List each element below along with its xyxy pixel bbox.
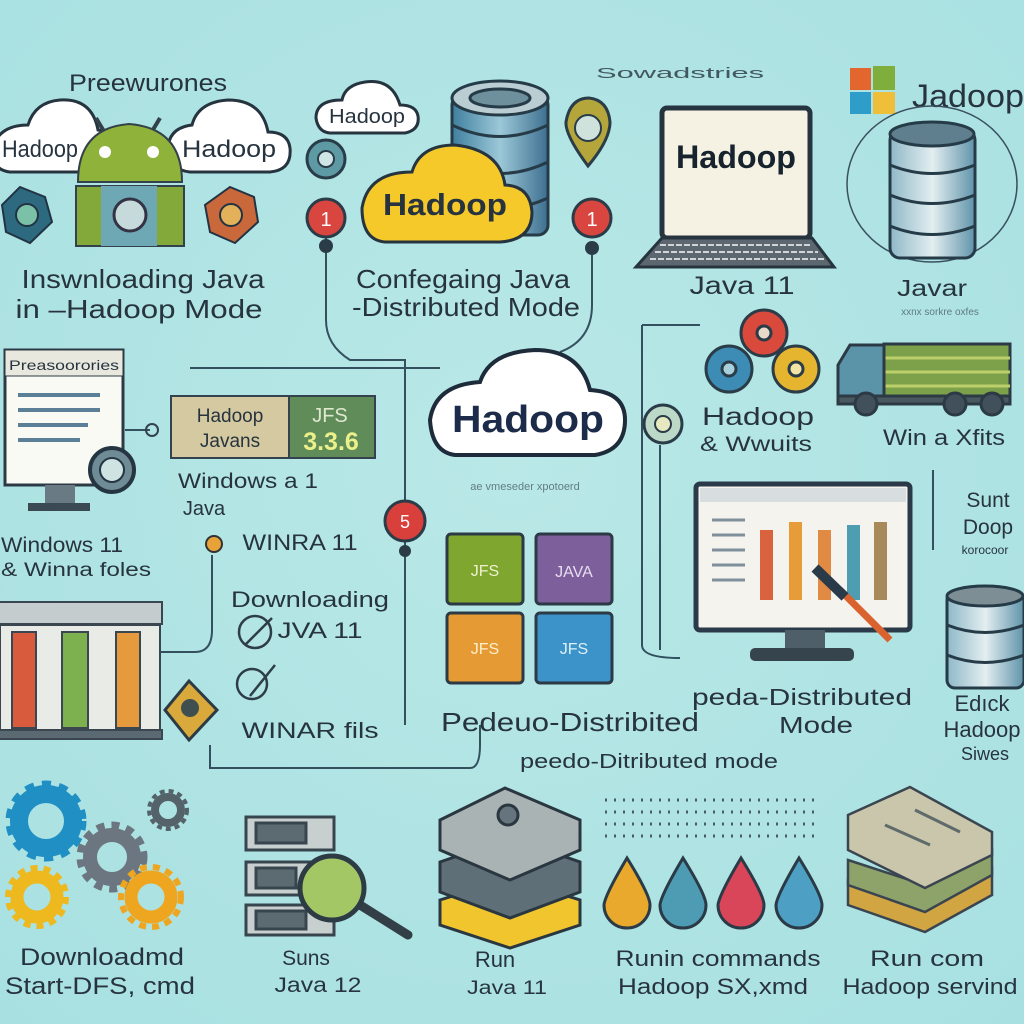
panel: columns and downloading	[0, 587, 389, 743]
icon: grey gear	[80, 825, 144, 889]
text: run: Run	[475, 947, 515, 972]
panel: laptop top right	[596, 65, 834, 300]
icon: yellow diamond	[165, 681, 217, 740]
text: doop: Doop	[963, 516, 1013, 539]
text: faint caption: korocoor	[962, 543, 1008, 557]
text: edick: Edıck	[954, 691, 1011, 716]
icon: yellow drop	[604, 858, 650, 928]
icon: second check circle	[237, 665, 275, 699]
tile: green JFS: JFS	[471, 563, 499, 580]
icon: red step marker: 5	[400, 512, 410, 532]
icon: windows logo	[850, 66, 895, 114]
icon: yellow Hadoop cloud	[362, 145, 532, 242]
heading: small top caption: Sowadstries	[596, 65, 764, 82]
tile: purple JAVA	[536, 534, 612, 604]
icon: blue gear	[9, 784, 83, 858]
text: hadoop label: Hadoop	[197, 406, 263, 427]
panel: pseudo distributed center	[385, 350, 778, 773]
text: hadoop mode: in –Hadoop Mode	[16, 294, 262, 324]
icon: laptop	[636, 108, 834, 267]
text: jva 11: JVA 11	[278, 618, 362, 643]
icon: red drop	[718, 858, 764, 928]
text: winra 11: WINRA 11	[242, 530, 358, 555]
text: configuring java: Confegaing Java	[356, 264, 571, 294]
icon: yellow gear left	[8, 868, 66, 926]
icon: red number one left	[307, 199, 345, 253]
panel: prerequisites document	[1, 350, 151, 581]
text: runin commands: Runin commands	[616, 946, 820, 971]
icon: large Hadoop cloud	[430, 350, 625, 455]
text: java 11: Java 11	[690, 272, 794, 300]
panel: configuring java top middle	[307, 81, 611, 322]
text: pseudo distributed: Pedeuo-Distribited	[441, 707, 699, 737]
panel: right database	[943, 586, 1024, 764]
icon: check circle	[239, 616, 272, 648]
icon: monitor	[696, 484, 910, 661]
icon: android robot	[76, 118, 184, 246]
icon: stacked cards	[848, 787, 992, 932]
icon: small database	[947, 586, 1024, 688]
icon: small dark gear	[149, 791, 187, 829]
tile: orange JFS	[447, 613, 523, 683]
icon: orange pin	[206, 536, 222, 552]
text: jfs label: JFS	[312, 405, 348, 427]
text: sunt: Sunt	[966, 489, 1010, 512]
text: run com: Run com	[870, 946, 984, 971]
icon: laptop: Hadoop	[676, 139, 796, 175]
text: distributed mode: -Distributed Mode	[352, 292, 580, 322]
icon: database stack	[452, 81, 548, 235]
icon: left Hadoop cloud	[0, 100, 118, 172]
heading: prerequisites: Preewurones	[69, 70, 227, 97]
text: hadoop servind: Hadoop servind	[842, 974, 1018, 999]
icon: magnifier	[300, 856, 408, 935]
text: pseudo distributed mode: peedo-Ditributed mode	[520, 751, 778, 773]
icon: stacked servers	[246, 817, 334, 935]
panel: run hadoop services	[842, 787, 1018, 999]
text: java 11: Java 11	[467, 978, 547, 999]
text: start dfs: Start-DFS, cmd	[5, 973, 195, 1000]
icon: hadoop java version box	[171, 396, 375, 458]
connector lines	[125, 235, 933, 768]
tile: orange JFS: JFS	[471, 641, 499, 658]
panel: version badge	[146, 396, 375, 555]
text: version number: 3.3.6	[303, 428, 359, 456]
icon: yellow Hadoop cloud: Hadoop	[383, 187, 507, 222]
tile: green JFS	[447, 534, 523, 604]
text: hadoop sx xmd: Hadoop SX,xmd	[618, 974, 808, 999]
panel: bottom gears	[5, 784, 195, 1000]
text: siwes: Siwes	[961, 744, 1009, 764]
icon: truck	[838, 344, 1010, 415]
icon: magnifier	[90, 448, 134, 492]
text: downloading java: Inswnloading Java	[22, 264, 265, 294]
icon: monitor with document: Preasoorories	[9, 357, 119, 373]
tile: purple JAVA: JAVA	[555, 564, 593, 581]
text: hadoop: Hadoop	[943, 717, 1021, 742]
text: faint caption: ae vmeseder xpotoerd	[470, 481, 580, 493]
heading: jadoop: Jadoop	[912, 78, 1024, 114]
icon: red number one left: 1	[320, 209, 332, 231]
text: java: Javar	[897, 275, 967, 301]
icon: three nodes	[706, 310, 819, 392]
icon: yellow gear right	[121, 867, 181, 927]
text: pseudo distributed: peda-Distributed	[692, 684, 912, 710]
icon: brush	[815, 568, 890, 640]
icon: blue drop	[776, 858, 822, 928]
icon: column server	[0, 602, 162, 739]
icon: database	[890, 122, 975, 258]
panel: top right corner	[847, 66, 1024, 318]
text: download and: Downloadmd	[20, 944, 184, 971]
text: javans label: Javans	[200, 431, 260, 452]
icon: teal drop	[660, 858, 706, 928]
icon: connector dot	[146, 424, 158, 436]
text: winuits: & Wwuits	[700, 433, 812, 456]
text: java: Java	[183, 498, 226, 520]
icon: monitor with document	[5, 350, 123, 511]
icon: left Hadoop cloud: Hadoop	[2, 136, 78, 163]
panel: run commands	[604, 800, 822, 999]
text: winna files: & Winna foles	[1, 560, 151, 581]
panel: monitor with bars	[692, 484, 912, 738]
text: java 12: Java 12	[274, 974, 362, 997]
tile: blue JFS	[536, 613, 612, 683]
text: win a xfits: Win a Xfits	[883, 425, 1005, 450]
icon: dot grid	[605, 800, 820, 836]
text: mode: Mode	[779, 712, 853, 738]
icon: right Hadoop cloud: Hadoop	[182, 136, 276, 163]
icon: right Hadoop cloud	[168, 100, 290, 172]
panel: search java	[246, 817, 408, 997]
text: faint caption: xxnx sorkre oxfes	[901, 307, 979, 318]
icon: red number one right: 1	[586, 209, 598, 231]
icon: small ring	[644, 405, 682, 443]
panel: run java	[440, 788, 580, 999]
icon: small Hadoop cloud	[316, 81, 418, 133]
icon: large Hadoop cloud: Hadoop	[452, 399, 604, 441]
text: windows a 1: Windows a 1	[178, 470, 318, 493]
tile: blue JFS: JFS	[560, 641, 588, 658]
text: windows 11: Windows 11	[1, 534, 123, 557]
text: hadoop: Hadoop	[702, 403, 814, 431]
icon: small Hadoop cloud: Hadoop	[329, 106, 405, 128]
icon: red number one right	[573, 199, 611, 255]
panel: prerequisites top left	[0, 70, 290, 324]
text: suns: Suns	[282, 947, 330, 970]
text: downloading: Downloading	[231, 587, 389, 612]
panel: hadoop and winutils	[644, 310, 819, 456]
icon: orbit ring	[847, 106, 1017, 262]
icon: orange hexagon	[205, 187, 258, 243]
icon: small teal circle	[307, 140, 345, 178]
text: winar files: WINAR fils	[242, 718, 378, 743]
icon: blue hexagon	[2, 187, 52, 243]
icon: layered boxes	[440, 788, 580, 948]
icon: red step marker	[385, 501, 425, 557]
icon: yellow pin	[566, 98, 610, 166]
panel: truck	[838, 344, 1013, 557]
